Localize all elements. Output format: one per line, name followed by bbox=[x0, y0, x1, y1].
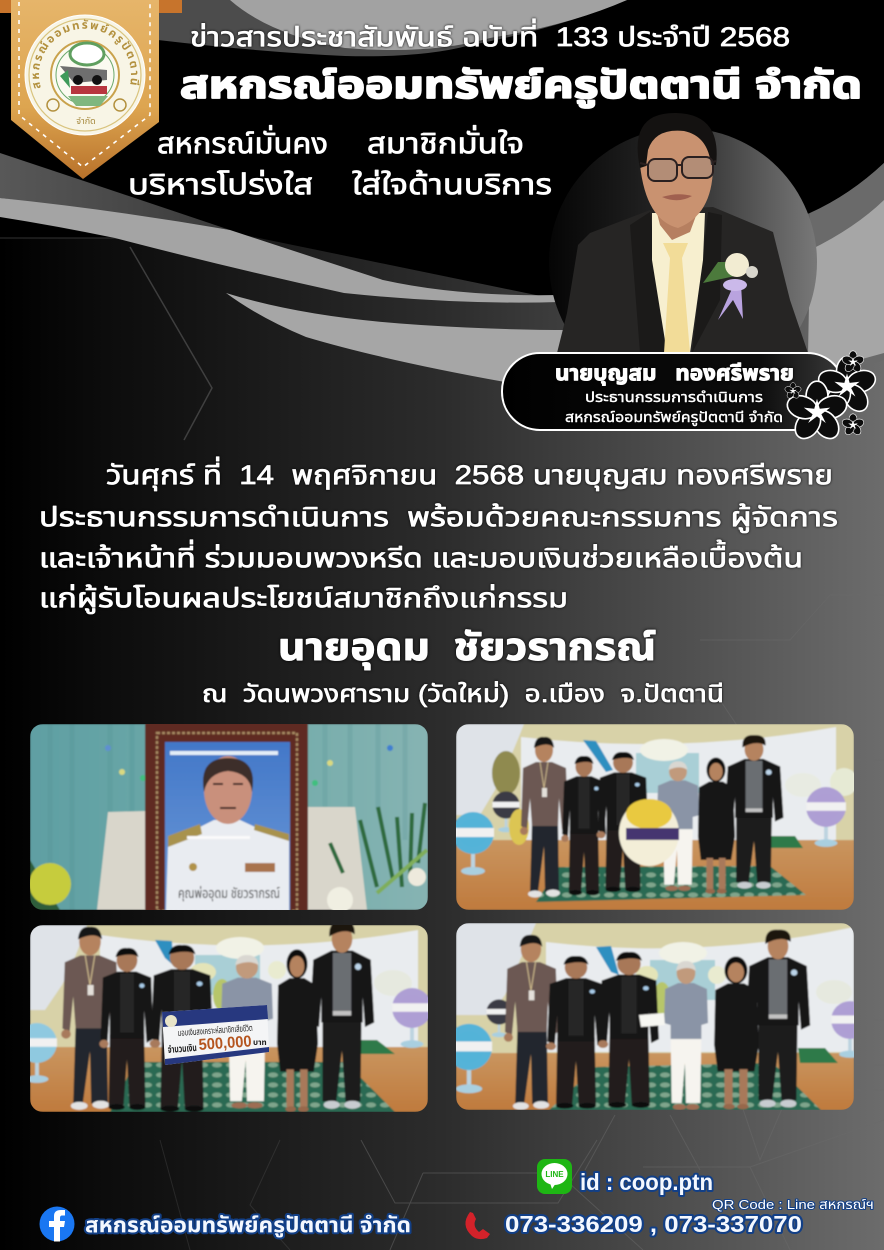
body paragraph: แก่ผู้รับโอนผลประโยชน์สมาชิกถึงแก่กรรม bbox=[39, 583, 568, 614]
swoosh: lower light band bbox=[226, 293, 570, 385]
name plate: ประธานกรรมการดำเนินการ bbox=[585, 389, 763, 405]
cheque board: มอบเงินสงเคราะห์สมาชิกเสียชีวิต bbox=[177, 1023, 253, 1038]
slogan: บริหารโปร่งใส bbox=[128, 169, 313, 201]
slogan: สหกรณ์มั่นคง bbox=[157, 125, 328, 160]
contact: phone: 073-336209 , 073-337070 bbox=[505, 1211, 802, 1237]
hair bbox=[638, 113, 717, 168]
jacket bbox=[557, 207, 808, 353]
icon: line bbox=[537, 1159, 572, 1194]
name plate bbox=[502, 353, 845, 430]
title: สหกรณ์ออมทรัพย์ครูปัตตานี จำกัด bbox=[180, 65, 862, 108]
slogan bbox=[128, 125, 552, 201]
body paragraph: ประธานกรรมการดำเนินการ พร้อมด้วยคณะกรรมการ ผู้จัดการ bbox=[39, 502, 838, 533]
envelope bbox=[639, 1013, 665, 1027]
cheque board: 500,000 bbox=[198, 1033, 252, 1054]
cheque board: จำนวนเงิน bbox=[167, 1042, 197, 1056]
photo: envelope handover bbox=[446, 923, 869, 1110]
photo: cheque board handover bbox=[17, 921, 432, 1112]
mouth bbox=[662, 194, 692, 200]
name plate: สหกรณ์ออมทรัพย์ครูปัตตานี จำกัด bbox=[565, 409, 783, 426]
venue line: ณ วัดนพวงศาราม (วัดใหม่) อ.เมือง จ.ปัตตานี bbox=[202, 680, 724, 708]
icon: facebook bbox=[40, 1206, 74, 1242]
wreath bbox=[619, 799, 679, 866]
shirt bbox=[652, 213, 705, 353]
face bbox=[640, 122, 713, 228]
slogan: ใส่ใจด้านบริการ bbox=[352, 169, 552, 201]
contact: LINE: id : coop.ptn bbox=[580, 1169, 713, 1195]
name plate: นายบุญสม ทองศรีพราย bbox=[555, 362, 794, 386]
contact: Facebook bbox=[40, 1206, 411, 1242]
deceased member name: นายอุดม ชัยวรากรณ์ bbox=[278, 627, 656, 670]
slogan: สมาชิกมั่นใจ bbox=[367, 125, 524, 160]
photo: framed portrait bbox=[29, 723, 428, 913]
photo: wreath presentation bbox=[452, 724, 858, 910]
newsletter issue line: ข่าวสารประชาสัมพันธ์ ฉบับที่ 133 ประจำปี 2568 bbox=[190, 18, 790, 52]
ribbon logo badge bbox=[0, 0, 182, 179]
swoosh: top dark bbox=[158, 0, 627, 56]
swoosh: light band left bbox=[0, 198, 560, 303]
icon: line: LINE bbox=[545, 1170, 564, 1179]
body paragraph: และเจ้าหน้าที่ ร่วมมอบพวงหรีด และมอบเงินช่วยเหลือเบื้องต้น bbox=[39, 539, 803, 573]
corsage bbox=[703, 253, 758, 320]
swoosh: top light bbox=[230, 0, 627, 50]
contact: LINE bbox=[537, 1159, 713, 1195]
tie bbox=[663, 243, 690, 353]
logo emblem: จำกัด bbox=[76, 116, 96, 126]
body paragraph: วันศุกร์ ที่ 14 พฤศจิกายน 2568 นายบุญสม ทองศรีพราย bbox=[106, 456, 833, 491]
neck bbox=[655, 205, 700, 240]
logo emblem bbox=[24, 14, 146, 136]
QR caption: QR Code : Line สหกรณ์ฯ bbox=[712, 1197, 874, 1212]
glasses bbox=[640, 157, 716, 181]
body paragraph bbox=[39, 456, 838, 614]
photo: framed portrait: คุณพ่ออุดม ชัยวรากรณ์ bbox=[178, 885, 280, 902]
swoosh: right grey bands bbox=[808, 163, 884, 380]
cheque board: บาท bbox=[253, 1038, 267, 1047]
portrait: chairman bbox=[557, 113, 808, 353]
icon: phone bbox=[465, 1212, 490, 1239]
swoosh: dark band left bbox=[0, 153, 230, 230]
lapels bbox=[630, 212, 722, 353]
cheque board bbox=[162, 1005, 269, 1065]
portrait backdrop circle bbox=[549, 128, 817, 396]
contact: Facebook: สหกรณ์ออมทรัพย์ครูปัตตานี จำกัด bbox=[85, 1213, 411, 1238]
icon: frangipani flowers bbox=[784, 351, 878, 443]
logo emblem: สหกรณ์ออมทรัพย์ครูปัตตานี bbox=[32, 19, 140, 88]
